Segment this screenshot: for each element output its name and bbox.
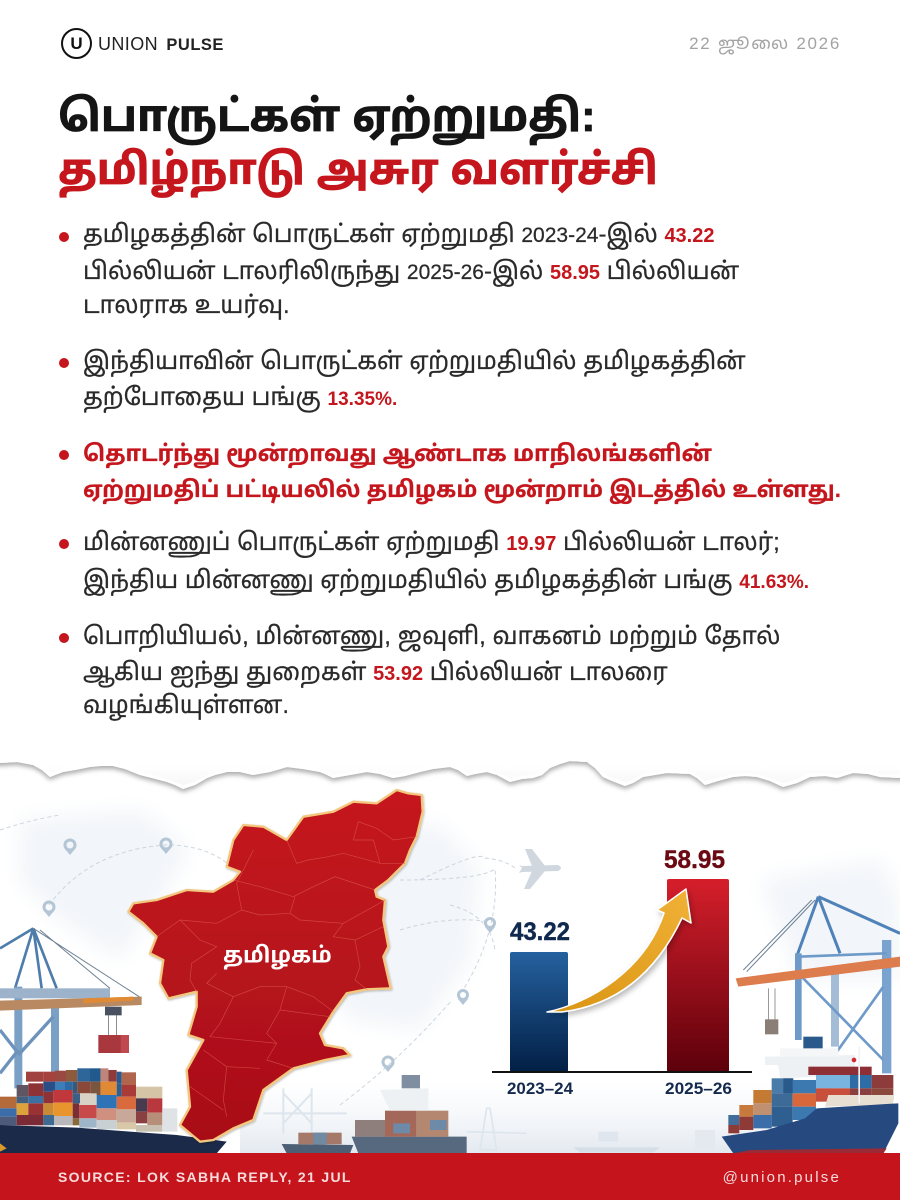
bullet 1: பில்லியன் டாலரிலிருந்து 2025-26-இல் 58.95 பில்லியன் (83, 258, 739, 285)
district borders (157, 822, 417, 1117)
icon: map pins (44, 839, 495, 1072)
category: 2025-26: 2025–26 (665, 1079, 732, 1098)
hull (0, 1125, 227, 1153)
bullet 1 (59, 221, 739, 320)
arrow: growth (547, 889, 691, 1012)
crane (0, 928, 142, 1088)
crane (743, 897, 900, 1073)
value: 43.22: 43.22 (510, 918, 570, 946)
far small crane (263, 1088, 347, 1133)
bullet 2: தற்போதைய பங்கு 13.35%. (83, 384, 397, 411)
brand name: UNION PULSE (98, 34, 224, 54)
bullet 1: டாலராக உயர்வு. (83, 292, 290, 319)
route lines (0, 815, 515, 1105)
upper sheet tint (0, 690, 900, 785)
bar chart (492, 846, 752, 1098)
bullet 3 highlighted: ஏற்றுமதிப் பட்டியலில் தமிழகம் மூன்றாம் இடத்தில் உள்ளது. (83, 477, 841, 502)
logo (61, 28, 224, 59)
map label: தமிழகம் (223, 943, 332, 970)
title line 2: தமிழ்நாடு அசுர வளர்ச்சி (58, 147, 658, 194)
category: 2023-24: 2023–24 (507, 1079, 574, 1098)
far small ship (282, 1144, 353, 1153)
bullet 4: இந்திய மின்னணு ஏற்றுமதியில் தமிழகத்தின் பங்கு 41.63%. (83, 567, 809, 594)
bar: 2023-24 (510, 952, 568, 1072)
bullet 1: தமிழகத்தின் பொருட்கள் ஏற்றுமதி 2023-24-இல் 43.22 (83, 221, 714, 248)
bullet 4 (59, 529, 809, 596)
right ship and crane (467, 897, 900, 1153)
title line 1: பொருட்கள் ஏற்றுமதி: (58, 93, 596, 141)
faint world map backdrop (20, 810, 900, 1030)
Tamil Nadu map (128, 790, 423, 1142)
footer band (0, 1153, 900, 1200)
left container ship and crane (0, 928, 467, 1153)
source line: SOURCE: LOK SABHA REPLY, 21 JUL (58, 1169, 352, 1185)
torn paper fringe (0, 0, 900, 789)
hazy far port skyline (240, 1080, 790, 1153)
far large ship (352, 1137, 467, 1153)
bullet 5: வழங்கியுள்ளன. (83, 692, 289, 719)
axis (492, 1071, 752, 1073)
title (58, 93, 658, 198)
bullet 2 (59, 348, 746, 413)
bullet 2: இந்தியாவின் பொருட்கள் ஏற்றுமதியில் தமிழகத்தின் (83, 348, 746, 375)
far skyline pieces (467, 1108, 527, 1150)
deck and hull (825, 1095, 893, 1107)
bullet 3 highlighted: தொடர்ந்து மூன்றாவது ஆண்டாக மாநிலங்களின் (83, 441, 712, 466)
bullet 5: ஆகிய ஐந்து துறைகள் 53.92 பில்லியன் டாலரை (83, 659, 668, 686)
date: 22 ஜூலை 2026 (689, 34, 841, 53)
handle: @union.pulse (723, 1169, 841, 1186)
containers (0, 1068, 177, 1132)
icon: U circle: U (70, 34, 83, 53)
bullet 4: மின்னணுப் பொருட்கள் ஏற்றுமதி 19.97 பில்லியன் டாலர்; (83, 529, 780, 556)
icon: U circle (61, 28, 92, 59)
bullet 5: பொறியியல், மின்னணு, ஜவுளி, வாகனம் மற்றும் தோல் (83, 623, 780, 650)
value: 58.95: 58.95 (664, 846, 725, 874)
superstructure (803, 1037, 823, 1049)
containers (728, 1067, 893, 1133)
bullet 3 highlighted (59, 441, 841, 504)
bar: 2025-26 (667, 879, 729, 1072)
bullet 5 (59, 623, 780, 721)
icon: airplane (519, 849, 561, 889)
